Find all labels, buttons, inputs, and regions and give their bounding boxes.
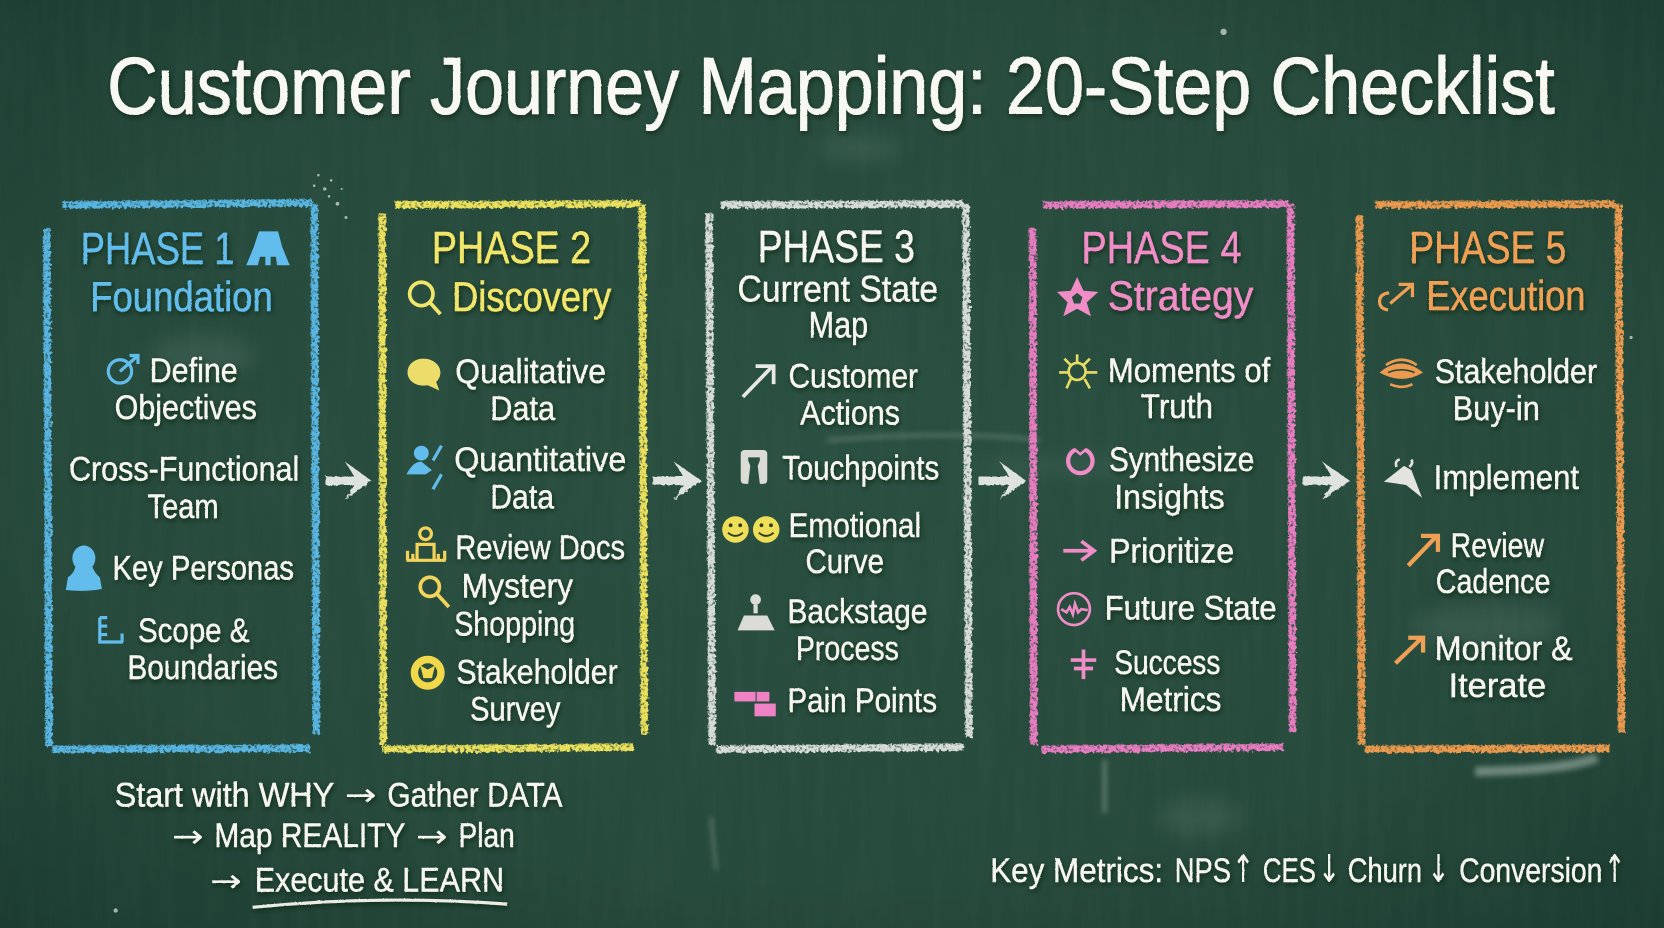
heading: phase 4	[1081, 222, 1254, 319]
phase 3 steps	[782, 357, 939, 720]
heading: phase 1: Foundation	[90, 274, 273, 320]
phase 2 steps: Review Docs	[455, 529, 625, 567]
icon: arrow right	[1063, 541, 1094, 560]
phase 5 steps: Stakeholder	[1435, 353, 1597, 391]
chalk border: phase 3	[709, 204, 969, 749]
phase 1 steps: Objectives	[115, 389, 257, 427]
summary flow note: →	[416, 817, 448, 855]
icon: building	[246, 231, 290, 265]
key metrics note: NPS	[1175, 852, 1231, 890]
phase 3 steps: Backstage	[787, 593, 928, 631]
phase 4 steps: Success	[1114, 644, 1220, 682]
heading: phase 3: Current State	[738, 267, 938, 309]
icon: orange arrow review	[1408, 536, 1438, 566]
phase 3 steps: Customer	[788, 357, 918, 395]
icon: sun	[1059, 354, 1097, 388]
phase 5 steps	[1434, 353, 1597, 705]
phase 5 steps: Buy-in	[1453, 390, 1540, 428]
icon: scope	[100, 618, 123, 642]
phase 2 steps: Data	[490, 478, 554, 516]
arrow: phase 4 to 5	[1303, 462, 1350, 500]
phase 4 steps: Future State	[1105, 590, 1277, 628]
chalk border: phase 2	[382, 204, 644, 749]
icon: target	[108, 355, 138, 383]
icon: dagger plus	[1071, 649, 1096, 679]
phase 4 steps: Synthesize	[1109, 441, 1254, 479]
phase 1 steps: Team	[148, 488, 219, 526]
heading: phase 2	[432, 222, 612, 320]
chalk border: phase 5	[1359, 204, 1622, 749]
phase 4 steps: Metrics	[1120, 681, 1221, 719]
icon: person	[66, 545, 102, 591]
heading: phase 2: PHASE 2	[432, 222, 591, 273]
icon: review docs	[406, 528, 446, 560]
phase 3 steps: Curve	[805, 543, 884, 581]
key metrics note: Conversion	[1459, 852, 1602, 890]
key metrics note: ↑	[1232, 848, 1254, 892]
icon: future state circle	[1058, 593, 1090, 625]
panel: phase 3 current state map	[709, 204, 969, 749]
phase 2 steps: Qualitative	[455, 353, 606, 391]
icon: magnifier	[410, 282, 440, 314]
key metrics note: CES	[1263, 852, 1316, 890]
icon: touchpoints	[741, 450, 767, 484]
summary flow note: Map REALITY	[214, 817, 405, 855]
summary flow note: Execute & LEARN	[255, 861, 504, 899]
phase 3 steps: Pain Points	[787, 682, 937, 720]
panel: phase 5 execution	[1359, 204, 1622, 749]
phase 2 steps: Quantitative	[454, 441, 626, 479]
heading: phase 3: PHASE 3	[758, 221, 915, 272]
key metrics note: Churn	[1348, 852, 1422, 890]
chalk border: phase 1	[47, 203, 316, 749]
phase 5 steps: Review	[1451, 527, 1544, 565]
phase 1 steps: Key Personas	[113, 549, 294, 587]
arrow: phase 3 to 4	[978, 462, 1026, 500]
key metrics note: ↑	[1603, 848, 1626, 892]
heading: phase 4: PHASE 4	[1081, 222, 1242, 273]
phase 5 steps: Implement	[1434, 459, 1580, 497]
heading: phase 1: PHASE 1	[81, 223, 235, 274]
icon: orange arrow monitor	[1395, 638, 1423, 663]
icon: arrow up right	[743, 366, 774, 397]
summary flow note: Start with WHY	[115, 776, 334, 814]
summary flow note: →	[210, 861, 242, 899]
phase 5 steps: Monitor &	[1435, 630, 1573, 668]
phase 5 steps: Iterate	[1449, 667, 1546, 705]
icon: pain points	[734, 692, 776, 716]
key metrics note: ↓	[1427, 848, 1450, 892]
arrow: phase 2 to 3	[653, 462, 701, 500]
chalk border: phase 4	[1033, 204, 1293, 749]
arrow: phase 1 to 2	[326, 462, 371, 500]
phase 1 steps: Boundaries	[127, 649, 278, 687]
phase 2 steps: Stakeholder	[456, 653, 618, 691]
panel: phase 1 foundation	[47, 203, 316, 749]
phase 1 steps: Scope &	[138, 612, 250, 650]
phase 2 steps: Data	[490, 390, 555, 428]
phase 4 steps: Insights	[1114, 478, 1225, 516]
phase 1 steps: Cross-Functional	[69, 451, 299, 489]
icon: people chart	[406, 446, 441, 489]
phase 5 steps: Cadence	[1436, 563, 1550, 601]
icon: speech bubble	[408, 359, 440, 391]
heading: phase 4: Strategy	[1108, 273, 1254, 319]
phase 2 steps	[454, 353, 626, 729]
icon: mystery magnifier	[420, 577, 449, 607]
summary flow note: →	[172, 817, 204, 855]
key metrics note: ↓	[1318, 848, 1340, 892]
key metrics note: Key Metrics:	[990, 852, 1163, 890]
phase 1 steps: Define	[150, 352, 238, 390]
heading: phase 1	[81, 223, 273, 320]
icon: curved arrow	[1380, 284, 1412, 310]
phase 3 steps: Actions	[800, 394, 900, 432]
phase 3 steps: Emotional	[788, 507, 921, 545]
summary flow note: Plan	[458, 817, 515, 855]
heading: phase 5: Execution	[1426, 273, 1585, 319]
phase 4 steps: Moments of	[1108, 352, 1271, 390]
icon: implement	[1384, 459, 1422, 498]
icon: handshake lips	[1380, 360, 1423, 387]
icon: two smileys	[722, 516, 779, 543]
icon: star	[1057, 277, 1098, 316]
phase 2 steps: Shopping	[454, 606, 575, 644]
summary flow note	[115, 775, 563, 907]
phase 2 steps: Survey	[470, 691, 560, 729]
summary flow note: Gather DATA	[387, 776, 563, 814]
phase 3 steps: Touchpoints	[782, 450, 939, 488]
phase 3 steps: Process	[796, 630, 899, 668]
icon: stakeholder ring	[414, 660, 441, 686]
icon: backstage	[738, 594, 775, 630]
heading: phase 5: PHASE 5	[1409, 222, 1566, 273]
icon: ring	[1068, 449, 1093, 473]
panel: phase 4 strategy	[1033, 204, 1293, 749]
phase 4 steps	[1105, 352, 1277, 719]
heading: phase 3	[738, 221, 938, 345]
phase 1 steps	[69, 352, 299, 687]
heading: phase 5	[1409, 222, 1585, 319]
heading: phase 3: Map	[809, 303, 868, 345]
phase 4 steps: Prioritize	[1109, 532, 1234, 570]
key metrics note	[990, 848, 1626, 892]
phase 4 steps: Truth	[1141, 388, 1213, 426]
heading: phase 2: Discovery	[452, 274, 612, 320]
summary flow note: →	[345, 775, 377, 813]
phase 2 steps: Mystery	[462, 567, 573, 605]
panel: phase 2 discovery	[382, 204, 644, 749]
